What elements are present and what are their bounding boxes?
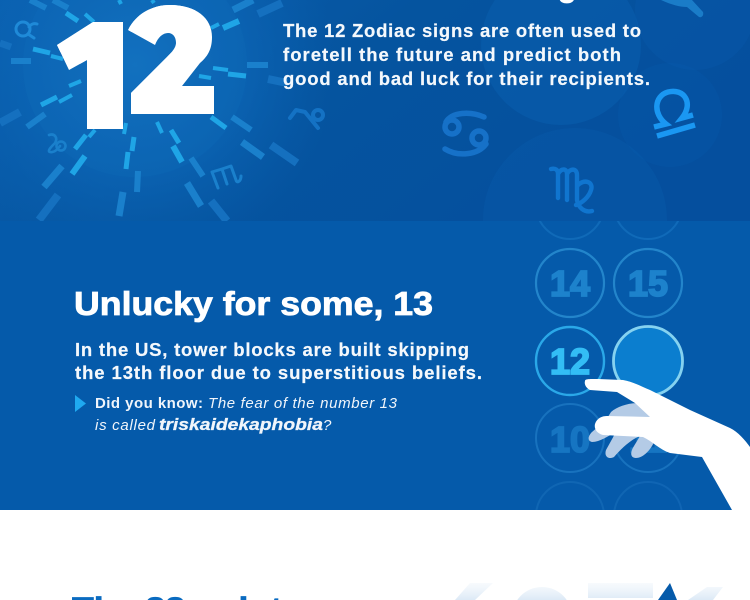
- text block: zodiac description: [283, 20, 650, 89]
- button 15: 15: [628, 263, 668, 304]
- button 11: [613, 436, 679, 473]
- icon: arrow marker: [75, 395, 86, 412]
- icon: zodiac glyph scorpio: [212, 166, 241, 188]
- background circles: [23, 0, 640, 212]
- text block: zodiac description: The 12 Zodiac signs are often used to: [283, 20, 641, 41]
- button 13 blank: [614, 326, 682, 396]
- text block: tower blocks: the 13th floor due to superstitious beliefs.: [75, 362, 482, 383]
- button 15: [614, 249, 682, 317]
- button 10: 10: [550, 419, 590, 460]
- text block: did you know: [95, 395, 398, 434]
- text block: did you know: The fear of the number 13: [208, 395, 398, 412]
- button 12: 12: [550, 341, 590, 382]
- heading: Unlucky for some, 13: Unlucky for some, 13: [74, 286, 433, 323]
- icon: zodiac glyph libra: [654, 91, 695, 136]
- text block: zodiac description: good and bad luck for their recipients.: [283, 68, 650, 89]
- text block: did you know: triskaidekaphobia: [159, 415, 323, 434]
- icon: zodiac glyph cancer: [445, 113, 486, 154]
- text block: zodiac description: foretell the future and predict both: [283, 44, 621, 65]
- text block: tower blocks: [75, 339, 482, 383]
- icon: curled fingers: [589, 403, 656, 458]
- panel: unlucky 13: [0, 221, 750, 510]
- text block: did you know: ?: [323, 417, 332, 434]
- text block: did you know: Did you know:: [95, 395, 203, 412]
- icon: zodiac glyph virgo: [551, 169, 592, 211]
- chart fragment: pale numerals: [455, 583, 723, 600]
- big number 12: [57, 5, 214, 129]
- icon: zodiac glyph sagittarius: [290, 110, 323, 128]
- button 10: [536, 404, 604, 472]
- lift buttons: [534, 221, 684, 510]
- button row bottom: [536, 481, 682, 510]
- icon: zodiac glyph capricorn: [49, 135, 66, 152]
- button 11: 11: [629, 419, 667, 460]
- button 12: [536, 327, 604, 395]
- icon: triangle peak: [658, 583, 677, 600]
- panel: zodiac signs: [0, 0, 750, 221]
- icon: zodiac glyph top left: [16, 22, 37, 38]
- button 14: [536, 249, 604, 317]
- icon: zodiac glyph top right: [661, 0, 703, 17]
- text block: did you know: is called: [95, 417, 156, 434]
- button 14: 14: [550, 263, 590, 304]
- icon: pointing hand: [585, 379, 750, 510]
- text block: tower blocks: In the US, tower blocks are built skipping: [75, 339, 469, 360]
- radiating dashes: [0, 0, 297, 221]
- panel: next section: [0, 510, 750, 600]
- button row top: [539, 221, 679, 240]
